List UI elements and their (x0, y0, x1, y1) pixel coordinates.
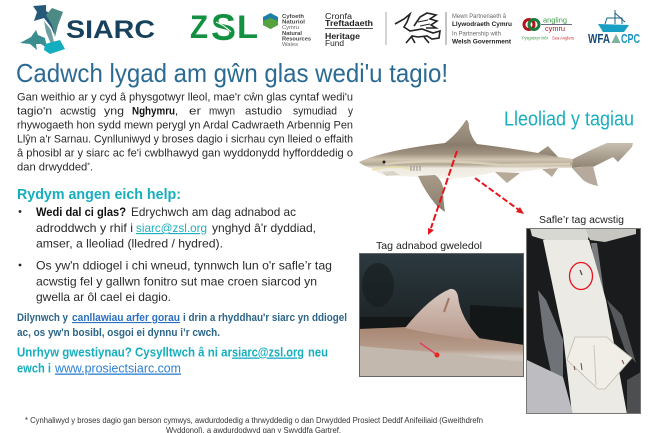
logo: ZSL: Z (190, 9, 208, 45)
intro paragraph: er (189, 106, 201, 118)
bullet list: amser, a lleoliad (lledred / hydred). (36, 238, 223, 250)
bullet list: ynghyd â'r dyddiad, (212, 222, 316, 235)
intro paragraph: yng (104, 106, 124, 118)
label: visual ID tag: Tag adnabod gweledol (376, 240, 482, 252)
logo: Natural Resources Wales (263, 13, 311, 48)
logo: WFA CPC: CPC (621, 31, 640, 46)
best practice note: i drin a rhyddhau'r siarc yn ddiogel (183, 312, 347, 324)
best practice note: canllawiau arfer gorau (72, 312, 180, 324)
shark illustration (359, 120, 633, 212)
best practice note (17, 312, 347, 339)
intro paragraph: â phosibl ar y siarc ac fe'i cwblhawyd gan wyddonydd hyfforddedig o (17, 148, 353, 160)
logo: In Partnership with Welsh Government: Mewn Partneriaeth â (452, 13, 506, 20)
logo: In Partnership with Welsh Government: In Partnership with (452, 30, 501, 38)
photo: visual ID tag on dorsal fin (359, 253, 524, 377)
logo: In Partnership with Welsh Government (452, 13, 512, 46)
intro paragraph: Gan weithio ar y cyd â physgotwyr lleol, mae'r cŵn glas cyntaf wedi'u (17, 92, 353, 104)
intro paragraph: dan drwydded (17, 162, 87, 174)
bullet list: Os yw'n ddiogel i chi wneud, tynnwch lun o'r safle’r tag (36, 260, 332, 272)
footnote: * Cynhaliwyd y broses dagio gan berson cymwys, awdurdodedig a thrwyddedig o dan Drwydded Prosiect Deddf Anifeiliaid (Gweithdrefn (25, 416, 483, 425)
intro paragraph: astudio (245, 106, 282, 118)
intro paragraph: , (175, 106, 178, 118)
logo: Angling Cymru (522, 16, 575, 42)
intro paragraph: * (87, 162, 90, 170)
logo: Heritage Fund (325, 12, 373, 48)
logo: Natural Resources Wales: Resources (282, 36, 311, 42)
logo: ZSL (190, 7, 258, 48)
logo: ZSL: L (237, 9, 258, 45)
logo: Heritage Fund: Treftadaeth (325, 19, 373, 28)
intro paragraph: tagio'n (17, 106, 52, 118)
intro paragraph: symudiad (293, 106, 337, 118)
logo: SIARC: SIARC (66, 16, 155, 44)
logo: Natural Resources Wales: Natural (282, 31, 302, 37)
logo: In Partnership with Welsh Government: Welsh Government (452, 38, 512, 46)
title: Cadwch lygad am gŵn glas wedi'u tagio! (16, 58, 448, 88)
intro paragraph: . (90, 162, 93, 174)
arrow: to acoustic tag (475, 178, 524, 214)
bullet list: acwstig fel y gallwn fonitro sut mae croen siarcod yn (36, 276, 317, 288)
intro paragraph: mwyn (209, 106, 235, 118)
logo: Angling Cymru: Sea Anglers (552, 36, 575, 42)
intro paragraph: acwstig (60, 106, 96, 118)
intro paragraph: y (348, 106, 353, 118)
arrow: to visual tag (428, 151, 457, 235)
logo: Angling Cymru: cymru (545, 24, 565, 33)
contact call to action: siarc@zsl.org (232, 344, 304, 360)
heading: tag locations: Lleoliad y tagiau (504, 108, 634, 130)
best practice note: ac, os yw'n bosibl, osgoi ei dynnu i’r cwch. (17, 327, 220, 339)
logo: Natural Resources Wales: Naturiol (282, 20, 305, 26)
logo: SIARC (20, 5, 155, 54)
logo: Welsh Government dragon (395, 13, 440, 43)
logo: In Partnership with Welsh Government: Llywodraeth Cymru (452, 21, 512, 28)
photo: acoustic tag site on underside (526, 228, 641, 414)
intro paragraph: Nghymru (132, 106, 175, 118)
logo: WFA CPC: WFA (588, 31, 610, 46)
intro paragraph: rhywogaeth hon sydd mewn perygl yn Ardal Cadwraeth Arbennig Pen (17, 120, 353, 132)
logo: Natural Resources Wales: Cyfoeth (282, 14, 305, 20)
bullet list (19, 206, 332, 304)
contact call to action: www.prosiectsiarc.com (54, 360, 181, 376)
logo: Heritage Fund: Cronfa (325, 12, 353, 21)
logo: ZSL: S (211, 7, 236, 48)
contact call to action (17, 344, 328, 376)
bullet list: Wedi dal ci glas? (36, 206, 126, 219)
footnote (25, 416, 483, 433)
bullet list: adroddwch y rhif i (36, 222, 133, 235)
bullet list: gwella ar ôl cael ei dagio. (36, 291, 171, 304)
logo: Heritage Fund: Heritage (325, 32, 361, 41)
intro paragraph (17, 92, 353, 174)
bullet list: Edrychwch am dag adnabod ac (131, 206, 296, 219)
logo: Angling Cymru: angling (543, 16, 567, 24)
logo: Angling Cymru: Pysgotwyr Môr (522, 36, 548, 42)
logo: Heritage Fund: Fund (325, 39, 344, 48)
logo: WFA CPC (588, 10, 640, 46)
best practice note: Dilynwch y (17, 312, 69, 324)
bullet list: siarc@zsl.org (136, 222, 207, 235)
label: acoustic tag site: Safle’r tag acwstig (539, 215, 624, 226)
intro paragraph: Llŷn a'r Sarnau. Cynlluniwyd y broses dagio i sicrhau cyn lleied o effaith (17, 134, 353, 146)
heading: we need your help: Rydym angen eich help: (17, 186, 181, 203)
contact call to action: Unrhyw gwestiynau? Cysylltwch â ni ar (17, 344, 232, 360)
logo: Natural Resources Wales: Cymru (282, 25, 299, 31)
contact call to action: ewch i (17, 360, 51, 376)
contact call to action: neu (308, 344, 328, 360)
logo: Natural Resources Wales: Wales (282, 42, 298, 48)
